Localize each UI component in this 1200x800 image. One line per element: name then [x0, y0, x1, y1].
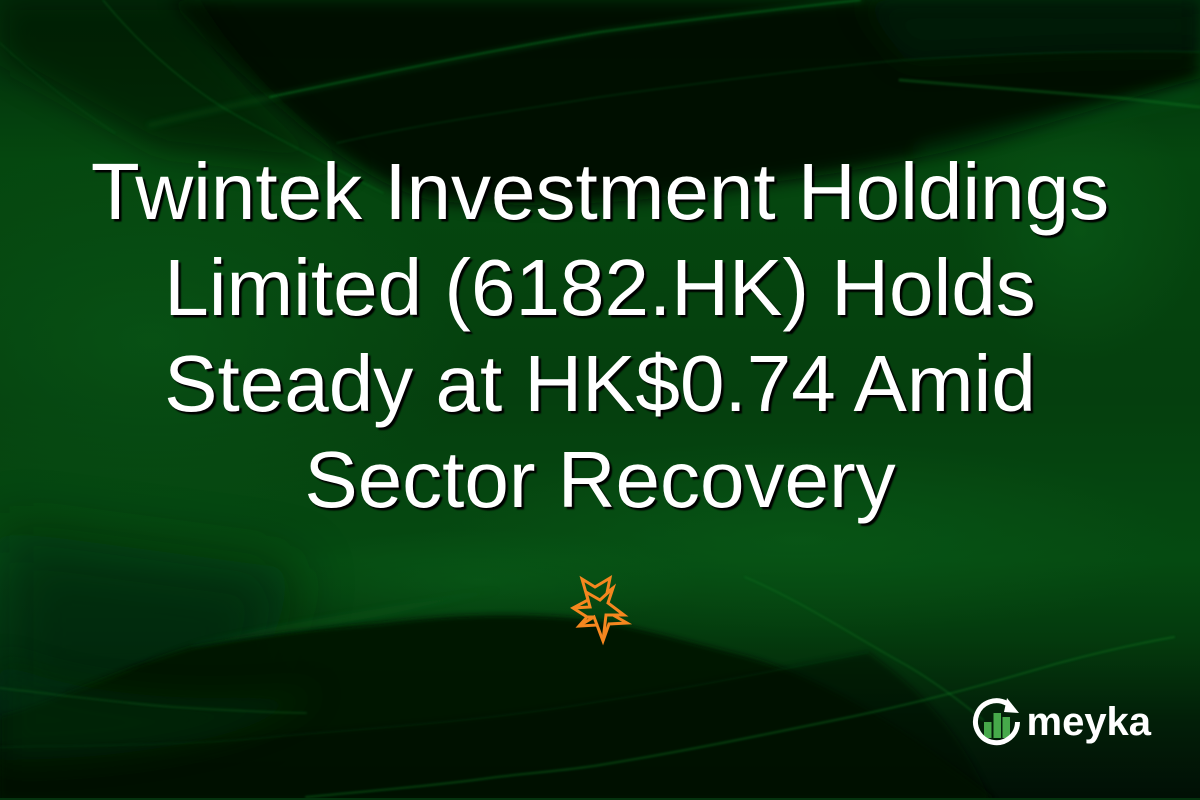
left darkening	[0, 530, 300, 720]
dark hill	[0, 615, 995, 800]
title: Sector Recovery	[304, 435, 896, 524]
light band above hill	[65, 590, 500, 693]
title	[91, 147, 1110, 527]
title: Steady at HK$0.74 Amid	[164, 339, 1036, 428]
icon: meyka circular arrow with bars	[972, 698, 1020, 746]
dark top	[120, 0, 1200, 205]
title: Twintek Investment Holdings	[91, 147, 1109, 236]
glows	[0, 140, 470, 540]
icon: orange star outline	[570, 575, 632, 646]
title: Limited (6182.HK) Holds	[164, 243, 1036, 332]
logo: meyka	[972, 698, 1152, 746]
logo wordmark: meyka	[1026, 700, 1151, 744]
